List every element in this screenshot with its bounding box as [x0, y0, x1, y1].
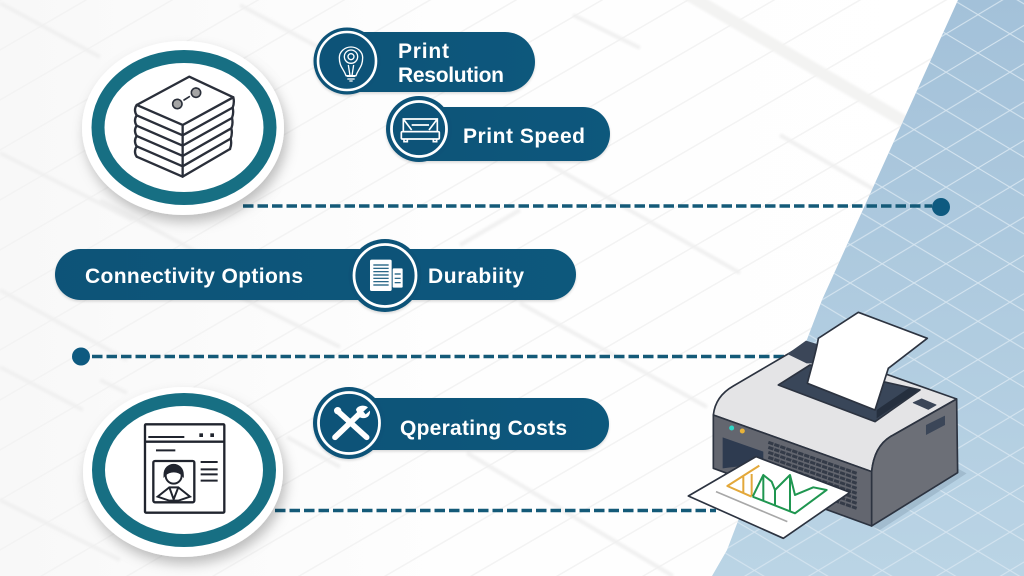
icon: stacked paper sheets — [135, 77, 234, 177]
label: Connectivity Options — [85, 265, 303, 288]
label: Print — [398, 40, 449, 63]
pill: Print Speed — [386, 96, 610, 162]
icon: print carriage — [401, 119, 439, 142]
label: Qperating Costs — [400, 417, 567, 440]
pill: Connectivity Options and Durability — [55, 239, 576, 312]
printer illustration — [688, 312, 967, 538]
icon: wrench and screwdriver — [334, 406, 370, 437]
label: Durabiity — [428, 265, 524, 288]
back tab — [787, 341, 820, 363]
dashed connector: bottom — [275, 509, 716, 512]
pill: Operating Costs — [313, 387, 609, 459]
printer front — [713, 415, 872, 526]
icon: light bulb — [339, 47, 363, 81]
icon: browser window with profile — [145, 424, 224, 513]
label — [398, 40, 504, 87]
status lights — [729, 425, 745, 433]
dashed connector: middle — [72, 348, 790, 366]
printer right side — [872, 399, 958, 526]
emerging paper — [807, 312, 927, 410]
pill: Print Resolution — [314, 28, 535, 94]
blue diagonal panel — [712, 0, 1024, 576]
icon: documents — [370, 260, 403, 291]
label: Print Speed — [463, 125, 585, 148]
panel: browser profile badge — [83, 387, 283, 557]
vent grille — [768, 442, 857, 508]
dashed connector: top — [243, 198, 950, 216]
shadow — [872, 468, 967, 530]
panel: paper stack badge — [82, 41, 284, 215]
side port — [926, 416, 945, 435]
output sheet with chart — [688, 457, 850, 538]
front slot — [723, 437, 763, 468]
label: Resolution — [398, 64, 504, 87]
control button — [913, 399, 936, 409]
paper tray opening — [778, 365, 920, 422]
printer top surface — [713, 345, 957, 472]
